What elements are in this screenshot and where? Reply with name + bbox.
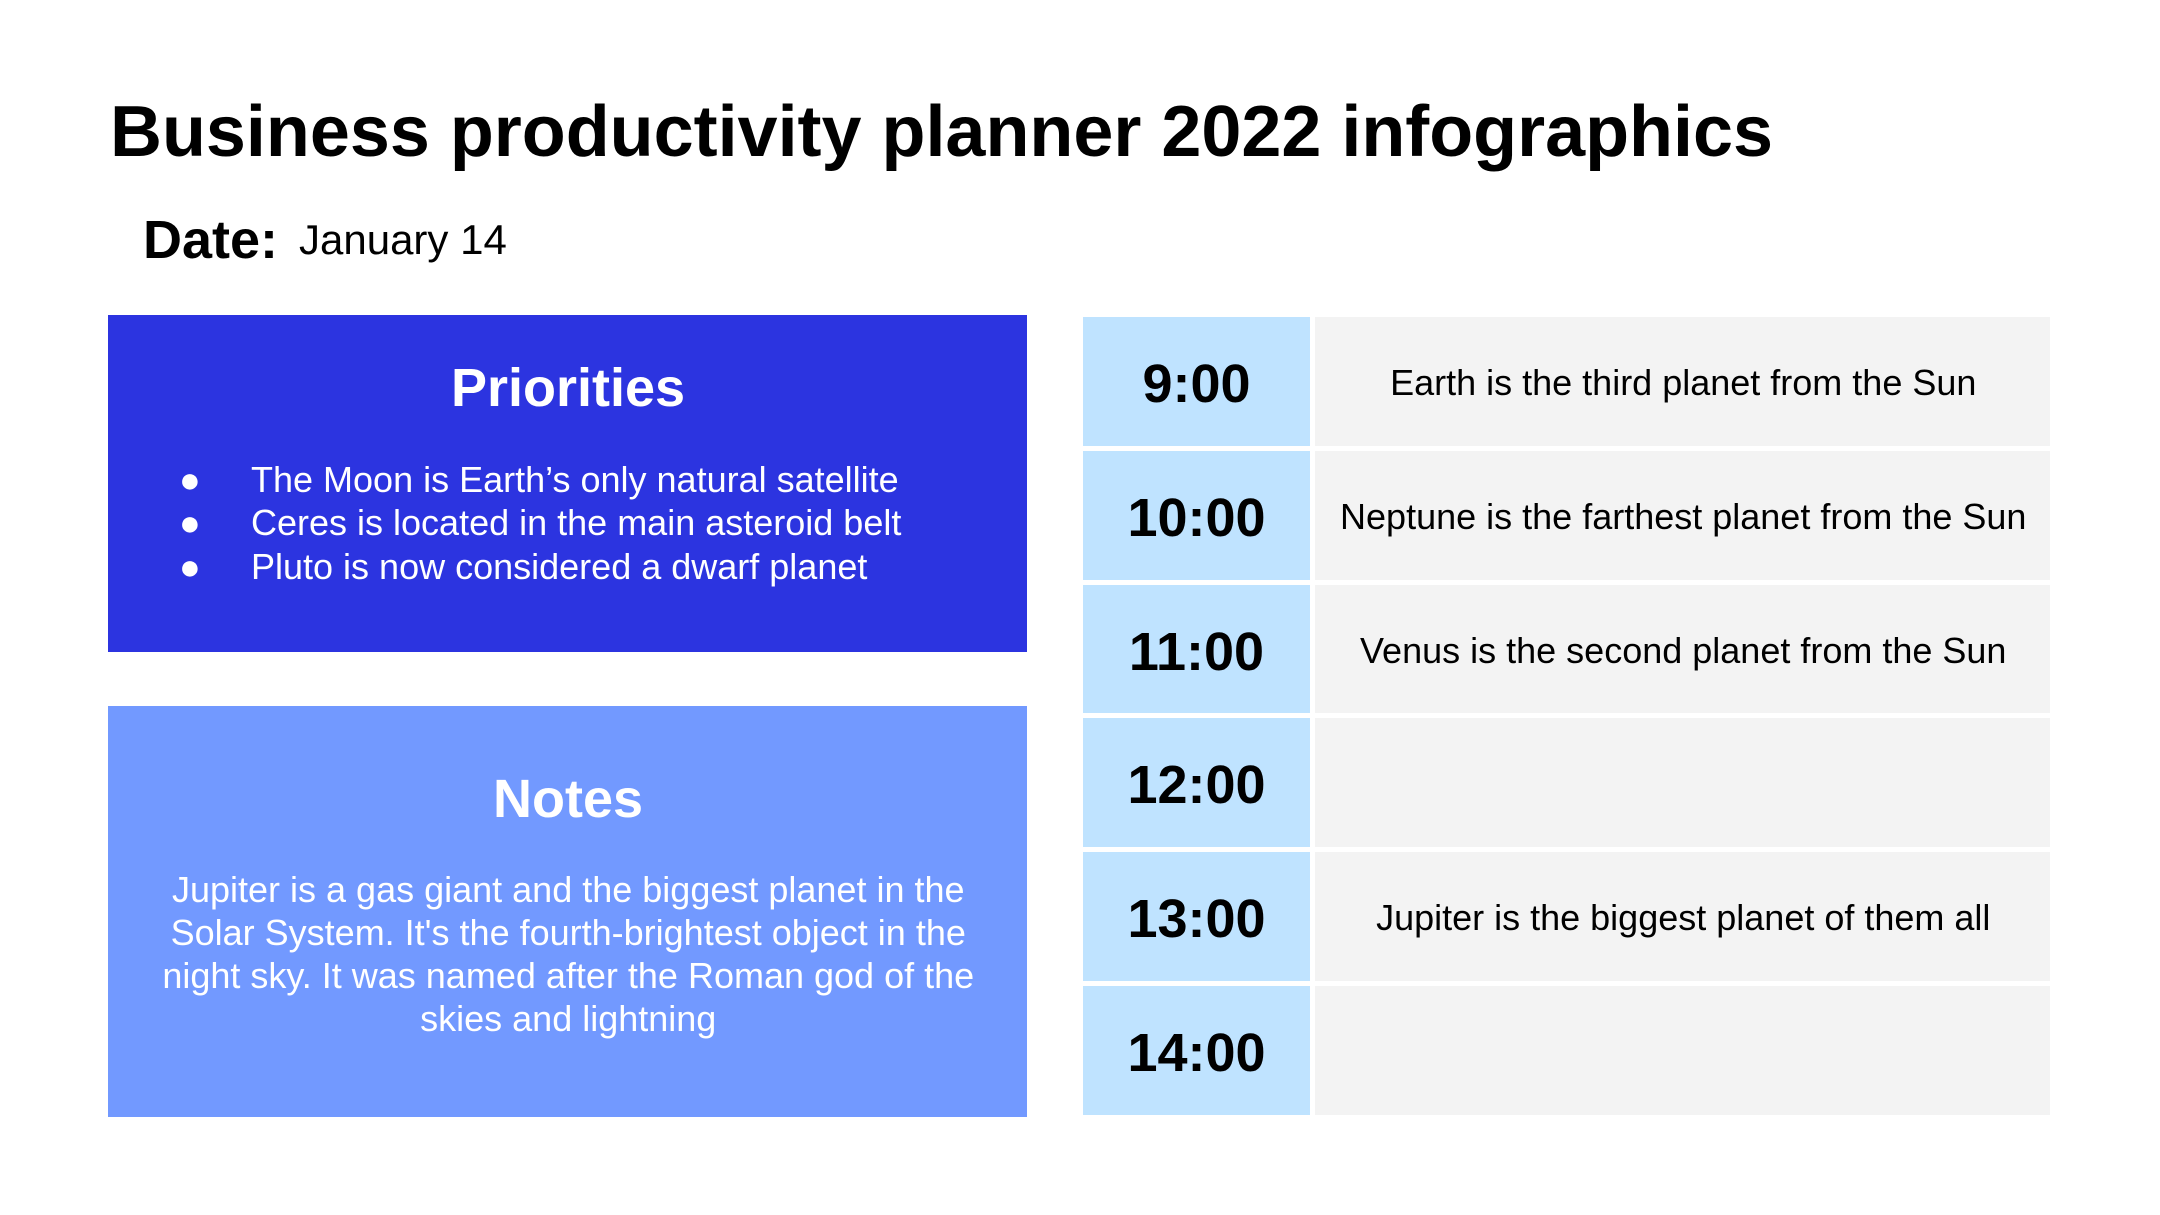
time 12:00: 12:00 [1127, 755, 1266, 815]
description 13:00 [1315, 852, 2050, 981]
priorities list: Ceres is located in the main asteroid belt [251, 502, 901, 543]
description 13:00: Jupiter is the biggest planet of them all [1376, 897, 1990, 938]
priorities list: The Moon is Earth’s only natural satellite [251, 459, 899, 500]
row 12:00 [1083, 718, 2050, 847]
priorities list: Pluto is now considered a dwarf planet [251, 546, 867, 587]
time 11:00: 11:00 [1129, 622, 1264, 682]
description 14:00 (empty) [1315, 986, 2050, 1114]
time 9:00: 9:00 [1142, 354, 1251, 414]
time 14:00: 14:00 [1127, 1022, 1266, 1082]
notes text: night sky. It was named after the Roman god of the [162, 955, 974, 996]
priority item 2: ● [179, 502, 201, 543]
priority item 3 [179, 546, 868, 587]
priority item 3: ● [179, 546, 201, 587]
description 10:00 [1315, 451, 2050, 580]
panel: priorities [108, 315, 1027, 652]
time 14:00 [1083, 986, 1310, 1114]
priorities list [179, 459, 902, 587]
date value: January 14 [299, 216, 507, 263]
row 13:00 [1083, 852, 2050, 981]
row 9:00 [1083, 317, 2050, 446]
time 13:00: 13:00 [1127, 889, 1266, 949]
description 9:00: Earth is the third planet from the Sun [1390, 362, 1976, 403]
priority item 2 [179, 502, 902, 543]
description 12:00 (empty) [1315, 718, 2050, 847]
priority item 1: ● [179, 459, 201, 500]
description 11:00: Venus is the second planet from the Sun [1360, 630, 2006, 671]
date label: Date: [143, 210, 278, 270]
description 9:00 [1315, 317, 2050, 446]
notes heading: Notes [493, 769, 643, 829]
time 12:00 [1083, 718, 1310, 847]
title: Business productivity planner 2022 infographics [110, 92, 1773, 172]
notes text: Jupiter is a gas giant and the biggest planet in the [172, 868, 965, 910]
panel: notes [108, 706, 1027, 1117]
notes text: Solar System. It's the fourth-brightest object in the [171, 912, 966, 953]
description 11:00 [1315, 585, 2050, 713]
time 10:00: 10:00 [1127, 488, 1266, 548]
priority item 1 [179, 459, 899, 500]
time 9:00 [1083, 317, 1310, 446]
time 13:00 [1083, 852, 1310, 981]
schedule table [1083, 317, 2050, 1115]
row 11:00 [1083, 585, 2050, 713]
row 10:00 [1083, 451, 2050, 580]
time 10:00 [1083, 451, 1310, 580]
row 14:00 [1083, 986, 2050, 1115]
notes text [162, 868, 974, 1039]
description 10:00: Neptune is the farthest planet from the Sun [1340, 496, 2026, 537]
time 11:00 [1083, 585, 1310, 713]
notes text: skies and lightning [420, 998, 716, 1039]
priorities heading: Priorities [451, 358, 685, 418]
